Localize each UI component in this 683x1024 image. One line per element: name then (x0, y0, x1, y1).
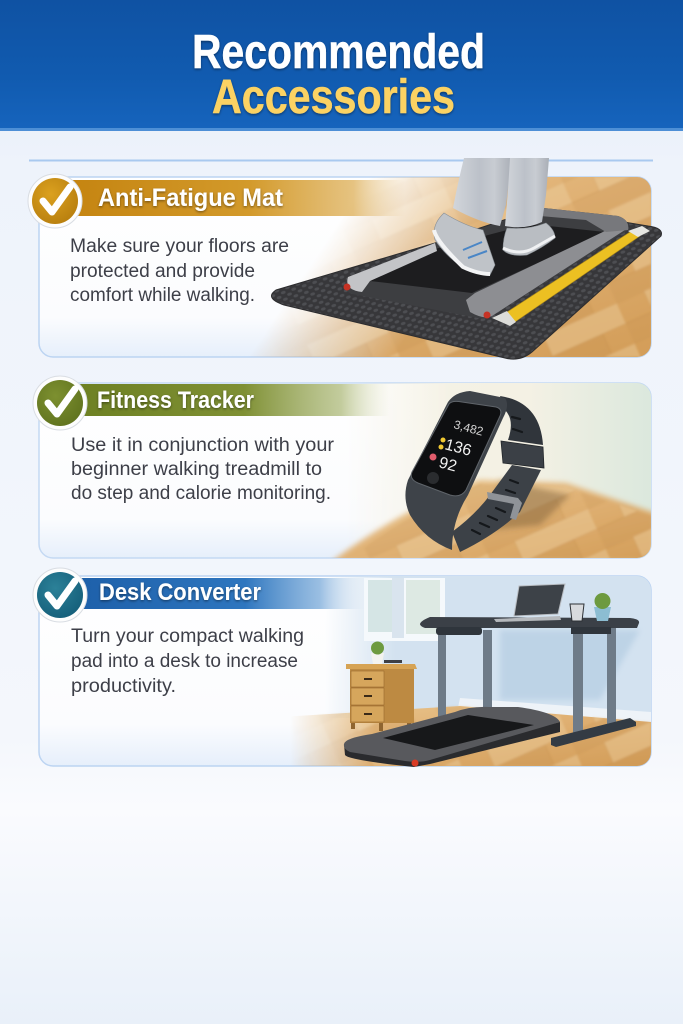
screen: 136 (443, 436, 473, 460)
description text: Turn your compact walking (71, 626, 304, 647)
header band (65, 578, 365, 609)
walking pad (344, 707, 560, 767)
description text (71, 626, 304, 697)
description text: comfort while walking. (70, 285, 255, 306)
illustration: fitness tracker band (405, 391, 570, 552)
cup (570, 604, 584, 621)
header band (60, 180, 405, 216)
heading: Desk Converter (99, 579, 261, 606)
desk top (420, 617, 639, 628)
blurred background and wood floor (331, 383, 651, 558)
description text: do step and calorie monitoring. (71, 483, 331, 504)
title: Recommended (192, 26, 485, 79)
illustration: treadmill on mat (272, 158, 661, 359)
desk base foot (551, 718, 636, 747)
rails (347, 243, 437, 292)
shoe left (434, 213, 495, 275)
screen: 92 (437, 454, 459, 475)
shoe right (503, 223, 555, 255)
screen (411, 401, 501, 496)
tape measure (492, 226, 650, 326)
description text: pad into a desk to increase (71, 651, 298, 672)
laptop (494, 584, 565, 622)
buckle (487, 492, 522, 520)
panel: anti-fatigue mat (28, 158, 661, 359)
small plant (371, 653, 384, 664)
description text: productivity. (71, 676, 176, 697)
header band (65, 384, 390, 416)
lower strap (452, 465, 541, 552)
red feet (344, 284, 350, 290)
panel: desk converter (33, 568, 651, 767)
panel: fitness tracker (33, 376, 655, 562)
treadmill frame (345, 208, 628, 319)
description text: protected and provide (70, 261, 255, 282)
screen: 3,482 (452, 417, 485, 439)
description text: Use it in conjunction with your (71, 435, 335, 456)
room background (295, 576, 651, 766)
plant pot (594, 593, 611, 621)
icon: check badge (28, 174, 82, 228)
strap keeper (501, 441, 544, 468)
front body (405, 391, 507, 550)
heading: Anti-Fatigue Mat (98, 184, 284, 212)
mat (272, 208, 661, 359)
icon: check badge (33, 376, 87, 430)
treadmill belt (370, 224, 605, 293)
cabinet (346, 642, 417, 731)
wood floor background (257, 177, 651, 357)
desk legs (438, 628, 616, 735)
icon: check badge (33, 568, 87, 622)
header banner (0, 0, 683, 131)
window (364, 578, 445, 641)
description text (70, 236, 289, 306)
illustration: standing desk and walking pad (344, 584, 639, 767)
description text (71, 435, 335, 504)
upper strap (500, 396, 543, 445)
pants (453, 158, 549, 227)
description text: beginner walking treadmill to (71, 459, 322, 480)
shadow (490, 480, 570, 530)
title: Accessories (212, 71, 455, 124)
divider line (29, 160, 653, 162)
description text: Make sure your floors are (70, 236, 289, 257)
title (192, 26, 485, 124)
heading: Fitness Tracker (97, 387, 254, 414)
